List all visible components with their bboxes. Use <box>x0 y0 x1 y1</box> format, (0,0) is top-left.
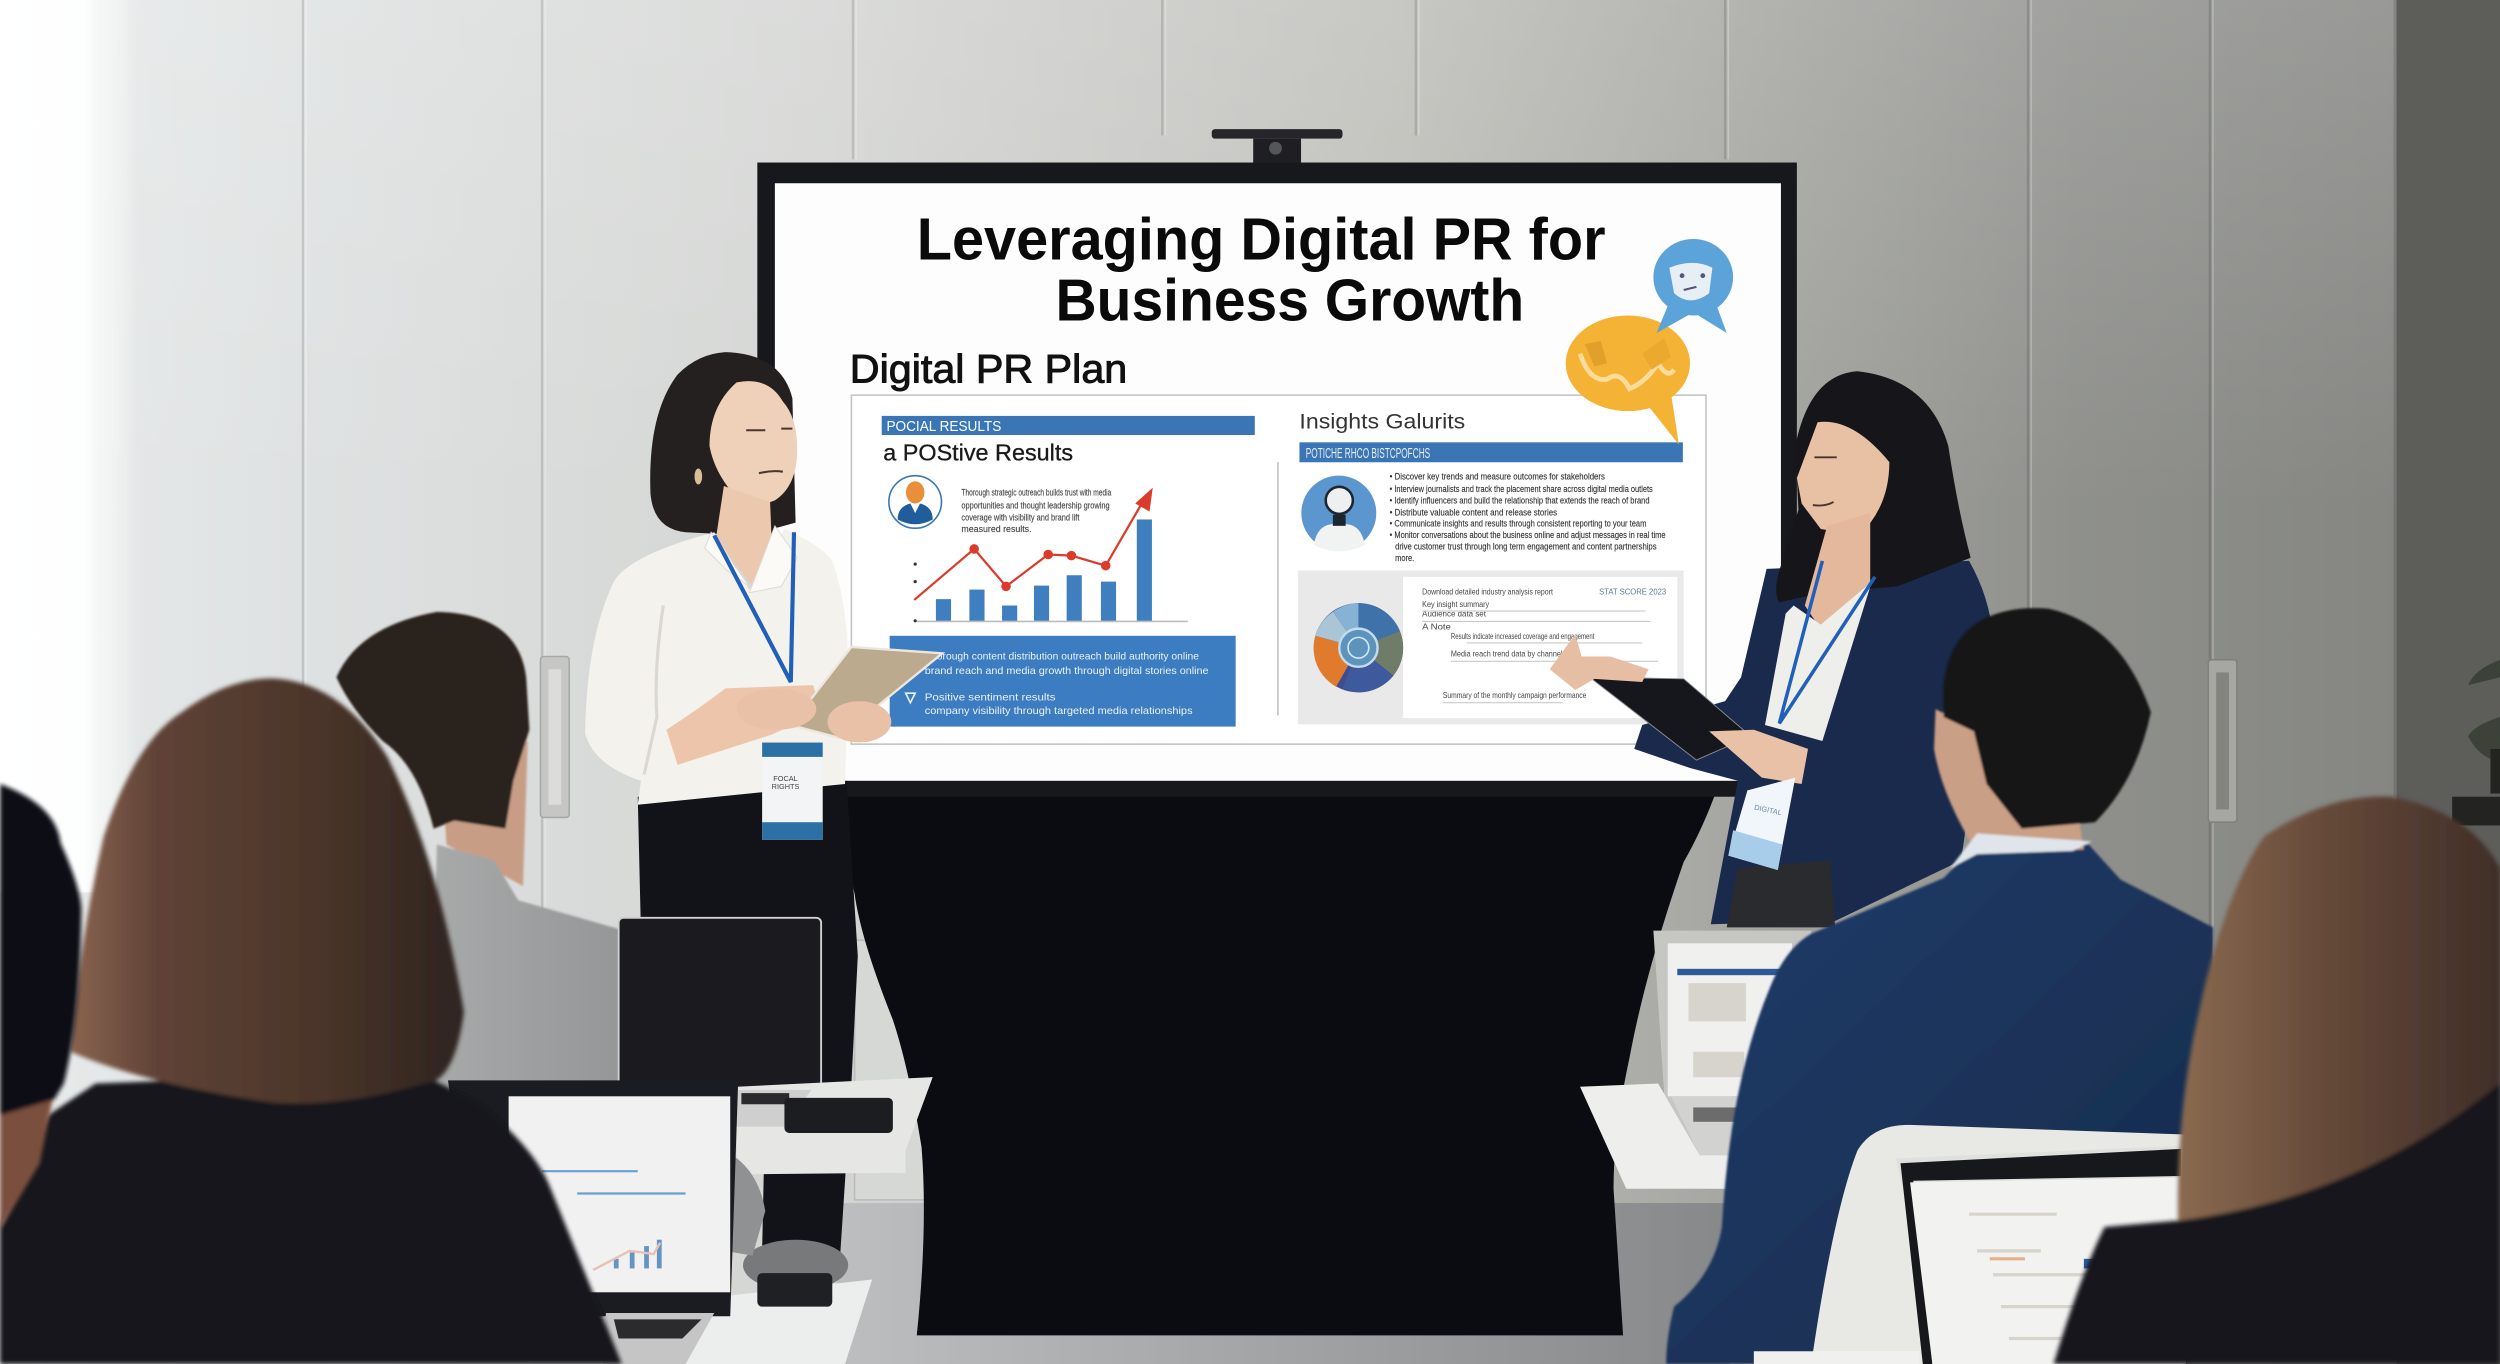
slide title: Business Growth <box>1055 268 1524 333</box>
cabinet handle right <box>2208 660 2237 822</box>
eyes and mouth <box>746 429 792 473</box>
pointing hand <box>1550 634 1649 690</box>
neck <box>716 486 772 586</box>
plant and shelf <box>2452 660 2500 825</box>
hair <box>1944 608 2151 829</box>
right bullet text: • Discover key trends and measure outcomes for stakeholders <box>1390 472 1605 482</box>
face <box>1797 422 1889 535</box>
white chair <box>1811 1125 2186 1364</box>
left blue summary box: brand reach and media growth through digital stories online <box>925 665 1209 677</box>
arm of seated man <box>717 1147 765 1256</box>
face <box>710 381 797 504</box>
report text <box>1422 587 1667 700</box>
vertical divider <box>1277 462 1279 715</box>
icon: blue speech bubble <box>1653 239 1733 333</box>
id badge: FOCAL <box>773 774 798 783</box>
table front left <box>623 1273 872 1364</box>
woman front right <box>2054 797 2500 1364</box>
icon: orange speech bubble <box>1566 316 1690 445</box>
navy suit <box>1666 845 2213 1364</box>
cabinet handle left <box>540 657 569 817</box>
holding hand <box>1709 730 1808 784</box>
earring <box>695 468 702 484</box>
blazer <box>1634 561 1993 924</box>
trousers <box>638 781 858 1254</box>
report text: Media reach trend data by channel <box>1451 650 1563 659</box>
laptop back right <box>1653 931 1811 1155</box>
table left <box>702 1077 933 1174</box>
seated man left <box>336 612 706 1103</box>
chart: donut pie <box>1314 603 1403 692</box>
slide subtitle: Digital PR Plan <box>850 347 1127 391</box>
laptop front left <box>448 1080 738 1364</box>
hair <box>70 679 464 1103</box>
shirt collar <box>1950 833 2092 868</box>
holding hands <box>737 688 891 743</box>
lanyard <box>714 532 794 682</box>
neck and ear <box>1934 709 2084 852</box>
grey suit <box>430 845 706 1103</box>
neck <box>442 741 528 886</box>
blazer <box>2054 1084 2500 1364</box>
id badge: DIGITAL <box>1753 803 1783 817</box>
hair <box>1776 371 1971 602</box>
cabinet base left <box>855 940 926 1200</box>
blazer <box>0 1071 622 1364</box>
right bullet text: • Interview journalists and track the placement share across digital media outlets <box>1390 484 1653 494</box>
lanyard <box>1779 561 1875 723</box>
right bullet text: more. <box>1395 553 1414 563</box>
left blue summary box: company visibility through targeted media relationships <box>925 705 1193 717</box>
slide title: Leveraging Digital PR for <box>917 208 1606 273</box>
report text: STAT SCORE 2023 <box>1599 587 1667 596</box>
hair <box>336 612 529 829</box>
left heading: a POStive Results <box>883 440 1073 466</box>
forearm and hand <box>666 685 821 765</box>
tablet <box>791 647 942 738</box>
id badge <box>762 743 823 840</box>
black draped table <box>837 789 1717 1335</box>
id badge: RIGHTS <box>772 782 799 791</box>
left caption text: coverage with visibility and brand lift <box>961 512 1080 522</box>
left blue summary box <box>890 636 1236 727</box>
id badge <box>1728 778 1795 870</box>
report text: Key insight summary <box>1422 600 1489 609</box>
presenter left <box>585 352 942 1254</box>
left caption text: measured results. <box>961 524 1032 534</box>
sleeve shadow <box>644 606 663 774</box>
right header bar <box>1299 442 1683 462</box>
blouse collar <box>705 526 797 593</box>
laptop back left <box>619 918 821 1127</box>
right heading: Insights Galurits <box>1299 410 1465 434</box>
camera on monitor <box>1212 129 1342 164</box>
presenter right <box>1550 371 1993 927</box>
blouse <box>1765 582 1872 741</box>
monitor <box>757 163 1797 797</box>
neck <box>1805 513 1870 629</box>
report text: Summary of the monthly campaign performance <box>1443 691 1587 700</box>
skirt <box>1727 860 1835 927</box>
black tablet <box>1590 677 1751 760</box>
slide content panel <box>851 395 1706 744</box>
report text: Audience data set <box>1422 610 1487 619</box>
table right <box>1580 1084 1738 1189</box>
report text: A Note <box>1422 622 1452 631</box>
right bullet text: drive customer trust through long term engagement and content partnerships <box>1395 542 1657 552</box>
left blue summary box: Positive sentiment results <box>925 691 1055 703</box>
report card with pie chart <box>1298 570 1684 724</box>
monitor screen <box>775 183 1781 781</box>
laptop front right <box>1896 1146 2181 1364</box>
chart: bars and trend line <box>914 488 1188 622</box>
left blue summary box: Thorough content distribution outreach build authority online <box>925 651 1199 663</box>
floor <box>837 1203 1730 1364</box>
small table bar <box>1754 1351 1920 1364</box>
monitor frame <box>757 163 1797 797</box>
left caption text: Thorough strategic outreach builds trust with media <box>961 488 1112 498</box>
woman front left <box>0 679 622 1364</box>
blouse <box>585 529 848 805</box>
facial lines <box>1813 457 1837 506</box>
left caption text: opportunities and thought leadership growing <box>961 500 1110 510</box>
left header bar <box>882 416 1255 435</box>
slide title <box>917 208 1606 333</box>
right bullet text: • Identify influencers and build the relationship that extends the reach of brand <box>1390 496 1650 506</box>
stool left <box>743 1240 848 1291</box>
report text: Download detailed industry analysis report <box>1422 587 1554 596</box>
seated man right <box>1666 608 2213 1364</box>
icon: round portrait <box>1301 476 1376 551</box>
right bullet text <box>1390 472 1665 563</box>
left caption text <box>961 488 1112 534</box>
right header bar: POTICHE RHCO BISTCPOFCHS <box>1306 446 1430 462</box>
report text: Results indicate increased coverage and engagement <box>1451 632 1595 641</box>
window curtain <box>0 0 137 892</box>
left header bar: POCIAL RESULTS <box>886 419 1001 435</box>
far left person <box>0 784 81 1230</box>
icon: person avatar <box>889 476 941 528</box>
hair <box>650 352 796 535</box>
right bullet text: • Distribute valuable content and release stories <box>1390 507 1557 517</box>
hair <box>2178 797 2500 1221</box>
right bullet text: • Communicate insights and results through consistent reporting to your team <box>1390 518 1647 528</box>
right bullet text: • Monitor conversations about the business online and adjust messages in real time <box>1390 530 1665 540</box>
